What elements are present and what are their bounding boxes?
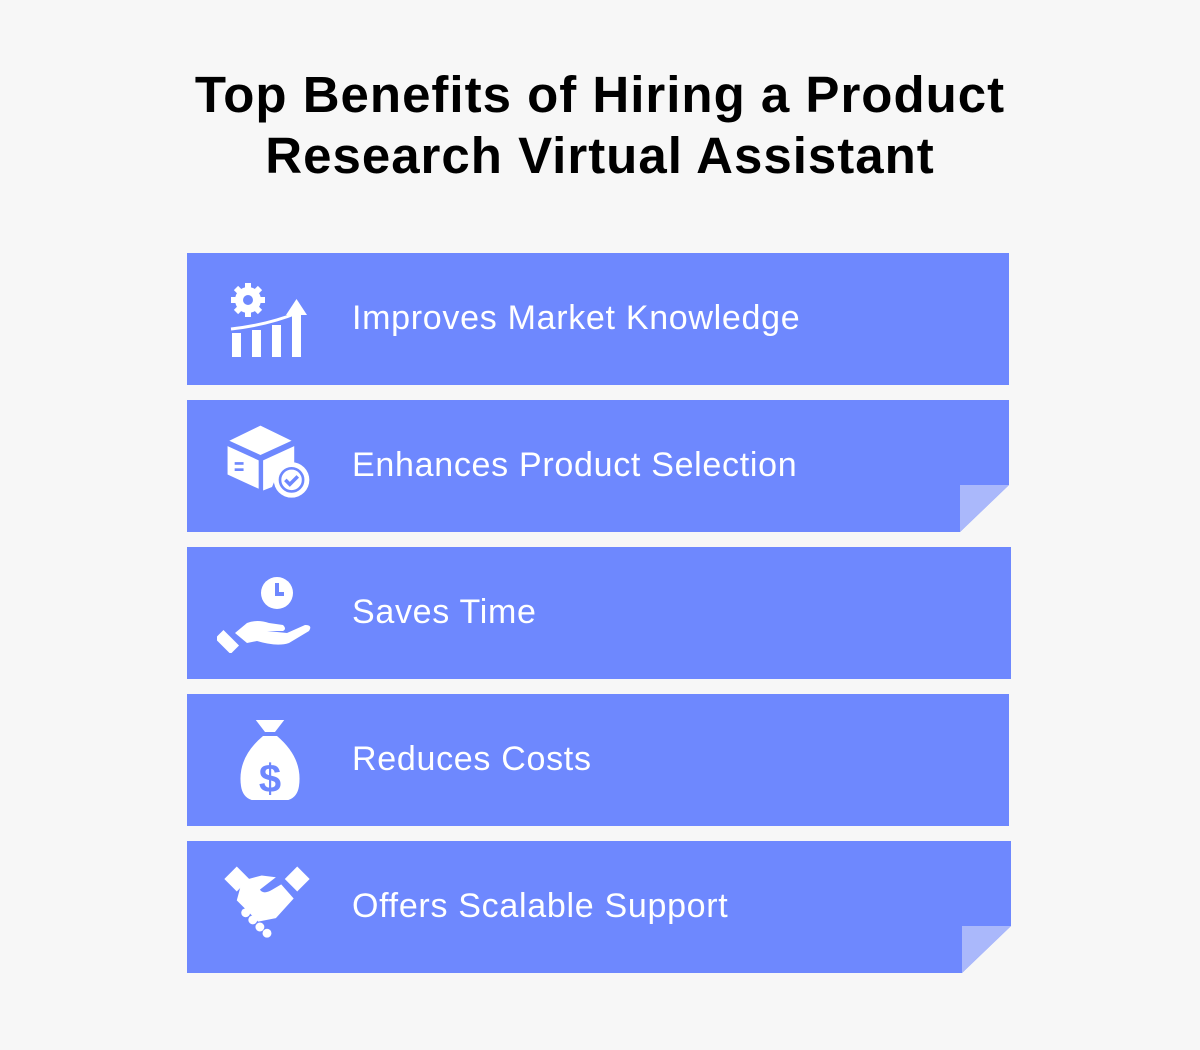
icon: money bag: $ [259, 757, 281, 800]
card 4 [187, 694, 1009, 826]
card 1 [187, 253, 1009, 385]
title: Research Virtual Assistant [265, 127, 935, 184]
icon: gear chart [230, 283, 307, 357]
title [195, 66, 1005, 184]
fold corner 5 [962, 926, 1010, 972]
card 2 [187, 400, 1009, 532]
label: Offers Scalable Support [352, 887, 728, 925]
icon: money bag [240, 720, 300, 800]
icon: hand clock [217, 577, 310, 653]
label: Enhances Product Selection [352, 446, 797, 484]
icon: box check [228, 426, 310, 498]
label: Improves Market Knowledge [352, 299, 800, 337]
label: Saves Time [352, 593, 537, 631]
icon: handshake [224, 866, 310, 938]
card 5 [187, 841, 1011, 973]
fold corner 2 [960, 485, 1008, 532]
title: Top Benefits of Hiring a Product [195, 66, 1005, 123]
card 3 [187, 547, 1011, 679]
label: Reduces Costs [352, 740, 592, 778]
